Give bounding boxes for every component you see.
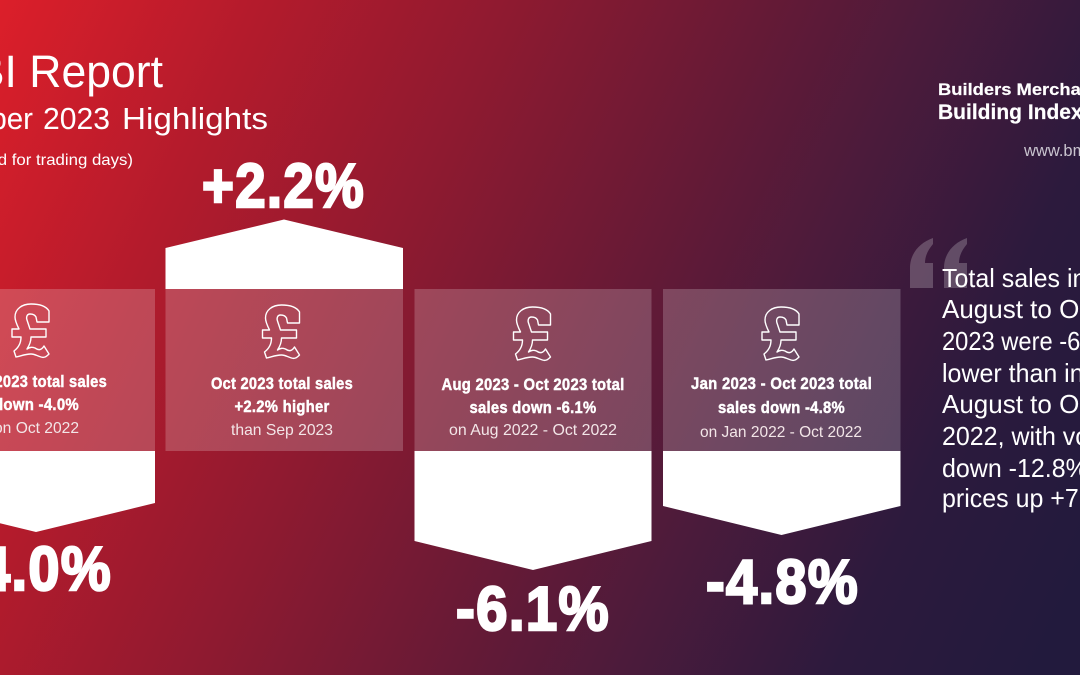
card text: than Sep 2023 [231, 422, 333, 439]
quote text: prices up +7 [942, 485, 1079, 513]
logo wordmark [938, 80, 1080, 124]
card text: Oct 2023 total sales [211, 375, 353, 393]
card text: Jan 2023 - Oct 2023 total [691, 375, 872, 393]
card text: +2.2% higher [234, 398, 330, 416]
value: +2.2% [202, 152, 365, 221]
card text: on Aug 2022 - Oct 2022 [449, 422, 617, 439]
white arrow up [166, 220, 403, 289]
card text: on Jan 2022 - Oct 2022 [700, 424, 862, 441]
subtitle: Highlights [122, 101, 268, 136]
subtitle: 2023 [43, 101, 110, 136]
translucent card [414, 289, 652, 451]
translucent card [0, 289, 155, 451]
panel: Jan to Oct 2023 [663, 289, 900, 617]
value: -6.1% [456, 575, 610, 644]
card text: sales down -6.1% [470, 399, 597, 417]
white arrow down [414, 451, 652, 570]
white arrow down [0, 451, 155, 532]
card text: Aug 2023 - Oct 2023 total [442, 376, 624, 394]
panel: Oct 2023 year on year [0, 289, 155, 604]
value: -4.8% [706, 548, 859, 617]
card text [442, 376, 624, 439]
subtitle [0, 101, 268, 136]
card text: sales down -4.8% [718, 399, 845, 417]
icon: pound sign [762, 307, 799, 360]
quote text [942, 265, 1080, 513]
quote text: lower than in [942, 360, 1080, 388]
translucent card [663, 289, 900, 451]
icon: pound sign [514, 307, 550, 360]
translucent card [166, 289, 403, 451]
white arrow down [663, 451, 900, 535]
icon: pound sign [12, 304, 49, 357]
card text [691, 375, 872, 441]
panel: Aug to Oct 2023 [414, 289, 652, 644]
icon: pound sign [262, 305, 300, 358]
icon: quotation mark [910, 238, 967, 288]
card text [211, 375, 353, 439]
panel: Oct 2023 month on month [166, 152, 403, 451]
logo wordmark: Building Index [938, 101, 1080, 124]
card text [0, 373, 107, 437]
